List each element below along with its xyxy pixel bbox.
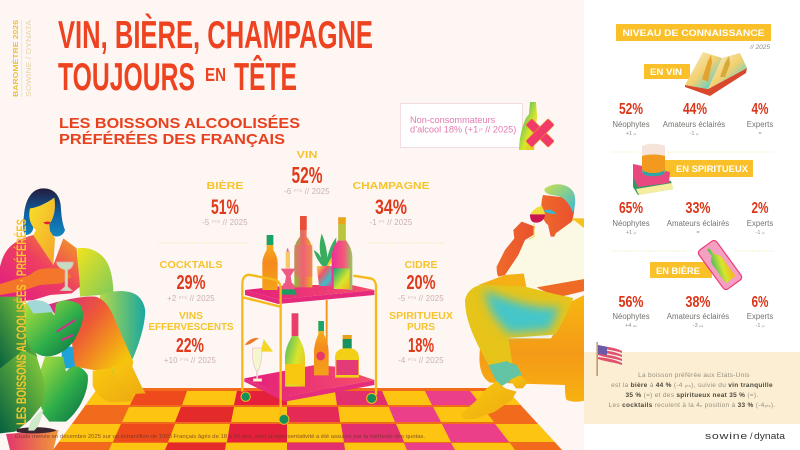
stat: vins effervescents: +10: [164, 356, 178, 365]
subtitle: PRÉFÉRÉES DES FRANÇAIS: [59, 131, 285, 148]
stat: vins effervescents: EFFERVESCENTS: [148, 321, 234, 333]
stats: wine knowledge: 4%: [752, 101, 768, 118]
stats: beer knowledge: -3 pts: [693, 323, 704, 329]
stat: cocktails: COCKTAILS: [160, 259, 222, 271]
stats: beer knowledge: Néophytes: [612, 312, 650, 321]
stats: wine knowledge: =: [758, 131, 762, 137]
sidebar label: barometre: SOWINE / DYNATA: [24, 20, 33, 97]
heading: niveau de connaissance: // 2025: [749, 44, 770, 51]
bottle: beer top: [262, 235, 278, 290]
frame: yellow poles: [242, 275, 376, 415]
wine glass: [529, 206, 545, 239]
bottle: champagne bottom: [285, 313, 305, 387]
cocktail glass: [245, 338, 273, 381]
stat: biere: // 2025: [220, 218, 248, 227]
socks: [488, 361, 522, 388]
stats: beer knowledge: 56%: [618, 294, 644, 311]
stat: biere: -5: [202, 218, 209, 227]
stat: champagne: -1: [370, 218, 377, 227]
stats: wine knowledge: 44%: [683, 101, 707, 118]
chair arm: [100, 291, 145, 378]
badge: en spiritueux: EN SPIRITUEUX: [676, 164, 749, 175]
pants: [47, 297, 133, 370]
stat: cocktails: +2: [167, 294, 176, 303]
stat: vin: -6: [284, 187, 291, 196]
woman arm: [0, 268, 72, 295]
stat: champagne: CHAMPAGNE: [352, 180, 430, 192]
title: VIN, BIÈRE, CHAMPAGNE: [58, 13, 373, 57]
stats: beer knowledge: 6%: [752, 294, 768, 311]
wheels: [241, 392, 377, 424]
stats: beer knowledge: 38%: [686, 294, 710, 311]
stat: spiritueux purs: -4: [398, 356, 405, 365]
stat: cocktails: [160, 259, 222, 303]
tray: bottom: [244, 365, 374, 402]
title: TÊTE: [234, 55, 297, 99]
woman face and neck: [29, 198, 55, 265]
stat: biere: BIÈRE: [206, 179, 244, 192]
panel: right white column: [584, 0, 800, 450]
stat: biere: PTS: [212, 219, 220, 224]
stat: champagne: [352, 180, 430, 227]
stats: beer knowledge: Experts: [747, 312, 773, 321]
stats: spirits knowledge: -1 pt: [756, 230, 765, 236]
tray: top: [245, 285, 374, 304]
stats: spirits knowledge: Néophytes: [612, 219, 650, 228]
arm: [497, 222, 535, 277]
stat: cidre: [398, 259, 444, 303]
chair back: [77, 248, 113, 297]
stat: vins effervescents: [148, 310, 234, 365]
stats: wine knowledge: Experts: [747, 120, 773, 129]
stat: biere: [202, 179, 248, 227]
panel: us callout: [584, 352, 800, 424]
stat: vin: VIN: [296, 149, 318, 161]
stat: cidre: CIDRE: [404, 259, 438, 271]
title: [58, 13, 373, 99]
logo: sowine / dynata: sowine: [705, 431, 748, 442]
stat: spiritueux purs: PURS: [407, 321, 435, 333]
panel: us callout: est la bière à 44 % (-4 pts), suivie du vin tranquille: [611, 382, 773, 389]
stats: spirits knowledge: 65%: [619, 200, 643, 217]
stats: wine knowledge: +1 pt: [626, 131, 636, 137]
stat: vins effervescents: 22%: [176, 335, 204, 357]
stat: cidre: // 2025: [416, 294, 444, 303]
subtitle: [59, 115, 300, 148]
bottle: whisky: [335, 335, 359, 378]
panel: checkered floor: [40, 388, 580, 450]
stat: cidre: PTS: [408, 295, 416, 300]
stat: vin: PTS: [294, 188, 302, 193]
leg teal shading: [483, 290, 560, 333]
stats: wine knowledge: Néophytes: [612, 120, 650, 129]
legs: [465, 284, 573, 365]
stats: spirits knowledge: [612, 200, 773, 236]
stat: cocktails: 29%: [176, 272, 206, 294]
pole: rear: [324, 300, 330, 367]
plant in pot: [314, 233, 336, 286]
icon: whisky glass on books: [633, 144, 673, 195]
shoe: [461, 375, 528, 419]
stat: spiritueux purs: // 2025: [416, 356, 444, 365]
stats: spirits knowledge: +1 pt: [626, 230, 636, 236]
stats: wine knowledge: 52%: [619, 101, 643, 118]
stat: champagne: 34%: [375, 196, 407, 219]
stats: wine knowledge: Amateurs éclairés: [663, 120, 725, 129]
stat: vins effervescents: // 2025: [188, 356, 217, 365]
chair: [478, 218, 584, 402]
callout: non-consumers: pt: [478, 126, 484, 132]
sidebar label: barometre: BAROMÈTRE 2026: [11, 20, 20, 97]
badge: en spiritueux: [665, 160, 753, 177]
stats: spirits knowledge: =: [696, 230, 700, 236]
pot: [6, 409, 58, 450]
callout: non-consumers: // 2025): [483, 124, 516, 134]
stat: vins effervescents: VINS: [179, 310, 203, 322]
illustration: bar cart with bottles: [241, 216, 377, 424]
callout: non-consumers: d’alcool 18% (+1: [410, 124, 478, 134]
stat: vins effervescents: PTS: [180, 357, 189, 362]
man head: [541, 195, 574, 237]
lips: [43, 222, 51, 224]
stat: cocktails: // 2025: [187, 294, 215, 303]
icon: us flag: [596, 342, 622, 376]
stats: spirits knowledge: Experts: [747, 219, 773, 228]
stats: beer knowledge: [612, 294, 773, 329]
panel: left background: [0, 0, 584, 450]
stat: cidre: -5: [398, 294, 405, 303]
callout: non-consumers: Non-consommateurs: [410, 115, 496, 125]
sidebar label: barometre: [11, 20, 33, 97]
panel: us callout: 35 % (=) et des spiritueux neat 35 % (=).: [626, 392, 758, 399]
icon: phone with bottle: [697, 239, 743, 291]
shirt: [505, 220, 584, 293]
stat: spiritueux purs: SPIRITUEUX: [389, 310, 453, 322]
stat: biere: 51%: [211, 196, 239, 219]
stat: cocktails: PTS: [179, 295, 187, 300]
moustache: [543, 210, 557, 214]
woman hair: [23, 188, 65, 237]
candle: [280, 247, 297, 295]
feet: [93, 362, 146, 402]
heading: niveau de connaissance: NIVEAU DE CONNAISSANCE: [622, 28, 764, 39]
plant leaves: [0, 297, 88, 433]
title: TOUJOURS: [58, 56, 195, 99]
woman top: [0, 235, 80, 303]
panel: us callout: La boisson préférée aux Etats-Unis: [638, 372, 750, 379]
icon: open book: [685, 52, 747, 96]
stat: champagne: // 2025: [385, 218, 413, 227]
bottle: wine top: [294, 216, 312, 287]
badge: en vin: EN VIN: [650, 67, 682, 78]
stats: spirits knowledge: Amateurs éclairés: [667, 219, 729, 228]
stat: spiritueux purs: PTS: [408, 357, 416, 362]
bottle: cider: [314, 321, 329, 375]
man hair: [544, 184, 575, 212]
stat: vin: 52%: [292, 162, 322, 188]
stat: cidre: 20%: [406, 272, 436, 294]
callout: non-consumers: [400, 102, 554, 150]
logo: sowine / dynata: [705, 431, 785, 442]
stats: wine knowledge: -1 pt: [690, 131, 699, 137]
illustration: man with wine glass: [461, 184, 584, 419]
footnote: Étude menée en décembre 2025 sur un échantillon de 1003 Français âgés de 18 à 65 ans, dont la représentativité a été assurée par la méthode des quotas.: [15, 433, 425, 440]
glass: [57, 262, 73, 291]
stat: spiritueux purs: 18%: [408, 335, 434, 357]
stats: spirits knowledge: 2%: [752, 200, 768, 217]
stat: vin: // 2025: [302, 187, 330, 196]
badge: en vin: [644, 64, 690, 79]
badge: en biere: EN BIÈRE: [656, 266, 700, 277]
bottle: champagne top: [332, 217, 352, 290]
stats: beer knowledge: +4 pts: [625, 323, 637, 329]
logo: sowine / dynata: /: [750, 431, 753, 441]
stats: wine knowledge: [612, 101, 773, 137]
illustration: woman in armchair: [0, 188, 146, 450]
badge: en biere: [650, 262, 712, 278]
heading: niveau de connaissance: [616, 24, 771, 51]
stat: champagne: PT: [379, 219, 385, 224]
stats: spirits knowledge: 33%: [686, 200, 710, 217]
stats: beer knowledge: -1 pt: [756, 323, 765, 329]
vertical overlay title: LES BOISSONS ALCOOLISÉES · PRÉFÉRÉES: [13, 219, 29, 425]
blue panel under legs: [62, 347, 75, 368]
stats: beer knowledge: Amateurs éclairés: [667, 312, 729, 321]
panel: us callout: Les cocktails reculent à la 4e position à 33 % (-4pts).: [609, 402, 775, 409]
logo: sowine / dynata: dynata: [754, 431, 785, 441]
stat: vin: [284, 149, 330, 196]
forearm: [537, 279, 584, 297]
title: EN: [205, 65, 226, 85]
stat: spiritueux purs: [389, 310, 453, 365]
subtitle: LES BOISSONS ALCOOLISÉES: [59, 115, 300, 132]
